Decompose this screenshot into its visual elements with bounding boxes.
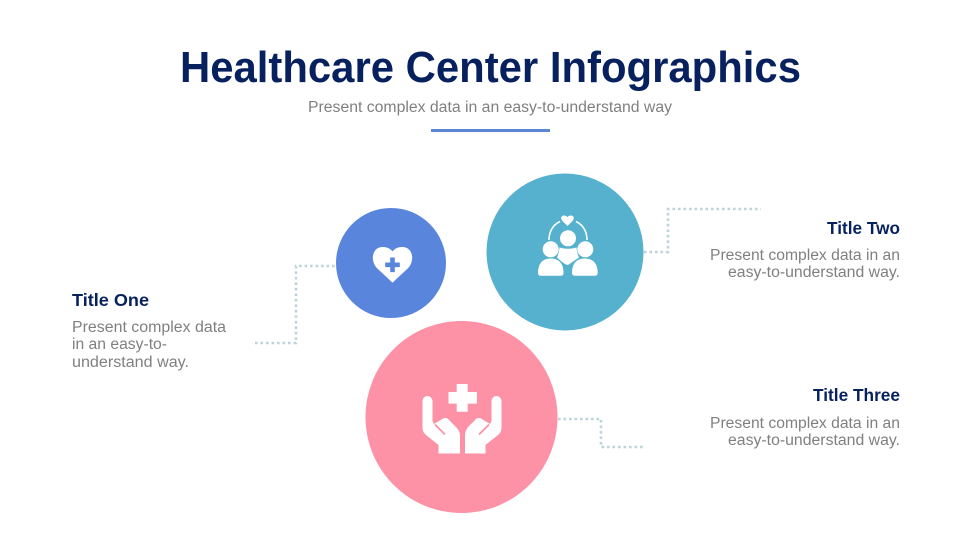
text block: title three: easy-to-understand way.: [728, 432, 900, 449]
icon: hands holding cross: [422, 384, 502, 454]
subtitle: Present complex data in an easy-to-understand way: [308, 99, 672, 116]
text block: title three: Present complex data in an: [710, 415, 900, 432]
text block: title two: easy-to-understand way.: [728, 264, 900, 281]
text block: title one: Title One: [72, 290, 149, 310]
icon: group of people with heart: [538, 216, 598, 276]
connector: title three: [558, 419, 645, 447]
text block: title one: [72, 290, 226, 371]
text block: title one: understand way.: [72, 354, 189, 371]
panel: blue circle with heart icon: [336, 208, 446, 318]
connector: title one: [255, 266, 335, 343]
connector: title two: [644, 209, 761, 252]
panel: pink circle with hands icon: [366, 321, 558, 513]
text block: title one: in an easy-to-: [72, 336, 167, 353]
text block: title two: Title Two: [827, 218, 900, 238]
text block: title two: Present complex data in an: [710, 247, 900, 264]
text block: title two: [710, 218, 900, 281]
title: Healthcare Center Infographics: [180, 43, 801, 92]
text block: title three: Title Three: [813, 385, 900, 405]
panel: teal circle with people icon: [486, 174, 644, 330]
text block: title three: [710, 385, 900, 449]
title underline: [431, 129, 550, 132]
text block: title one: Present complex data: [72, 319, 226, 336]
icon: heart with plus: [373, 247, 412, 282]
